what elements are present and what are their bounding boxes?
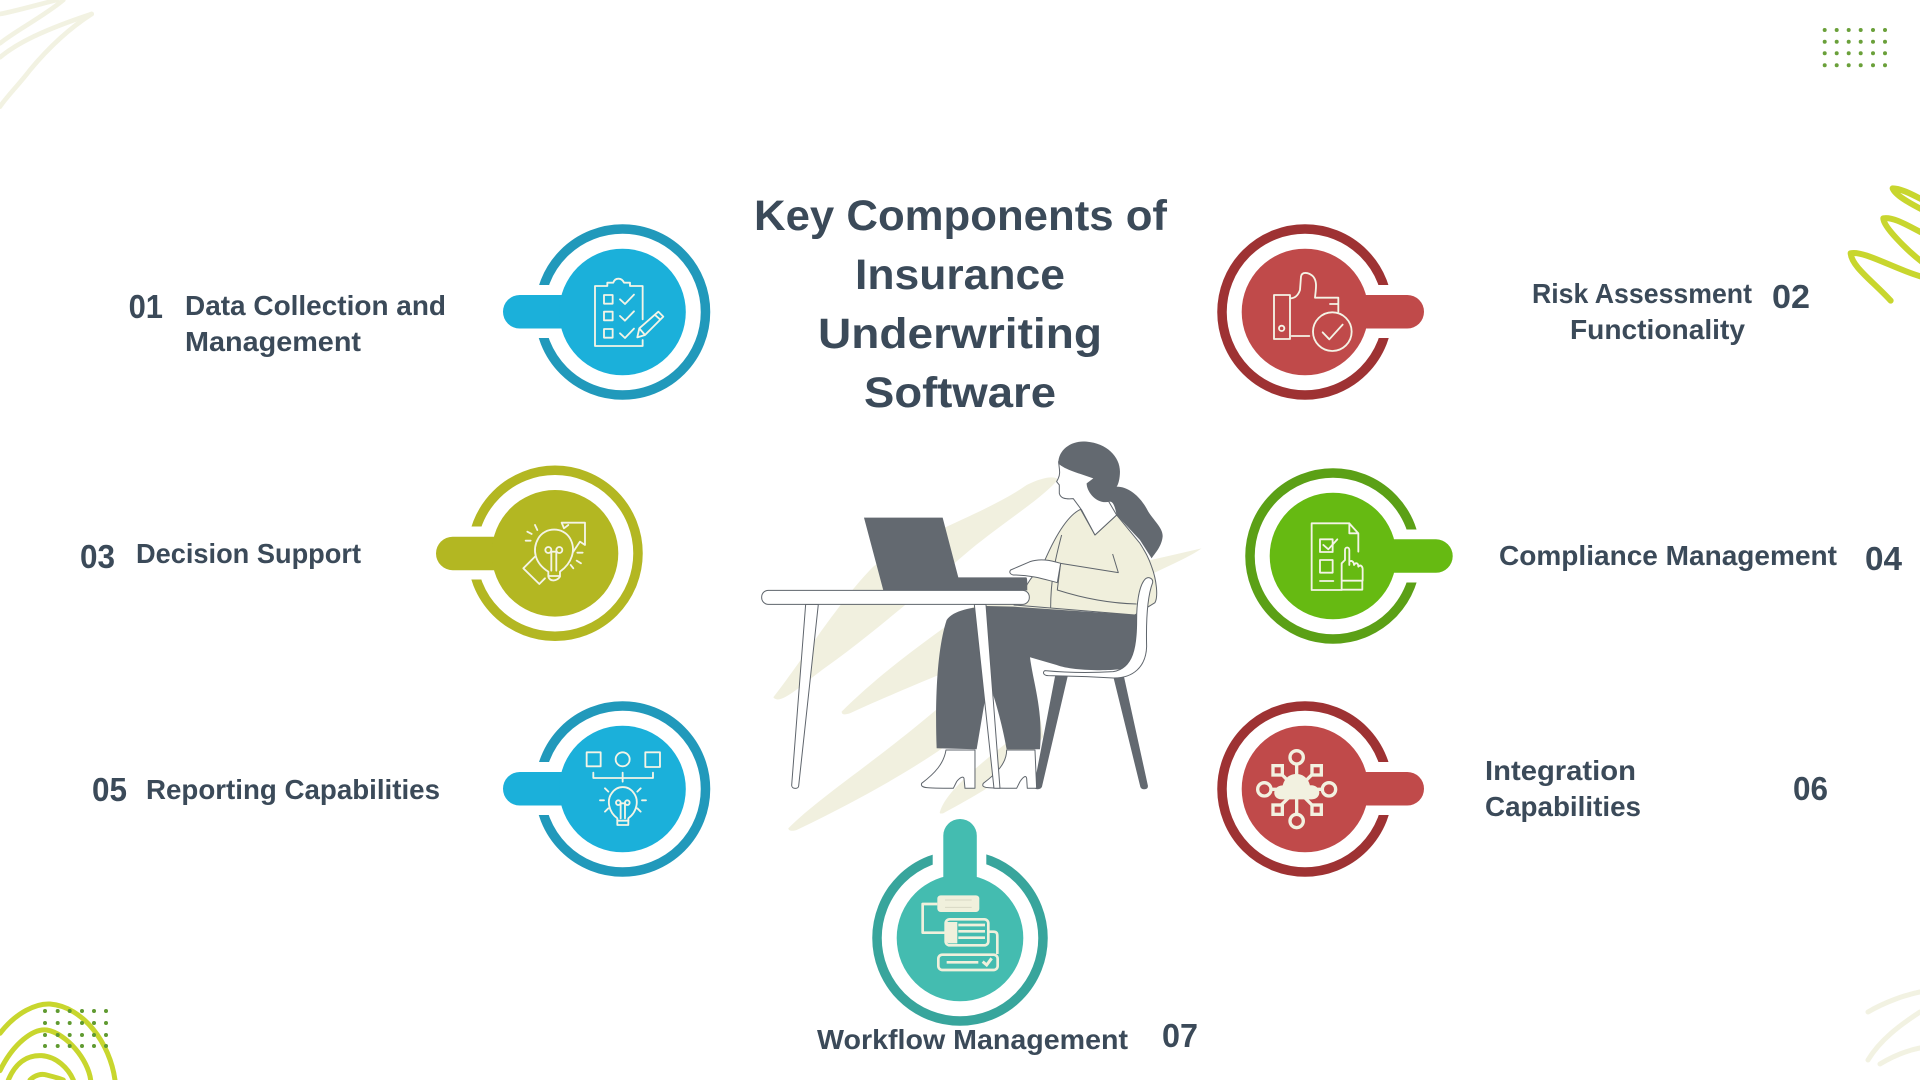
number 03: 03: [80, 538, 115, 575]
circle badge 03: [436, 470, 638, 636]
chair seat and back: [1044, 578, 1153, 678]
step 03: Decision Support: [80, 470, 638, 636]
title: Software: [864, 369, 1056, 417]
circle badge 01: [503, 229, 706, 395]
label 06: Integration: [1485, 755, 1636, 786]
brush strokes behind the figure: [773, 477, 1202, 831]
circle badge 06: [1222, 706, 1424, 872]
title: Underwriting: [818, 310, 1102, 358]
circle badge 07: [877, 819, 1043, 1021]
hair: [1058, 441, 1163, 558]
chair legs: [1035, 675, 1147, 789]
label 03: Decision Support: [136, 538, 361, 569]
number 01: 01: [129, 288, 163, 325]
circle badge 04: [1250, 473, 1453, 639]
number 05: 05: [92, 771, 127, 808]
label 01: Management: [185, 326, 361, 357]
step 06: Integration Capabilities: [1222, 706, 1828, 872]
icon: checklist with pencil: [595, 279, 663, 346]
icon: form with pointing hand: [1312, 523, 1363, 590]
circle badge 02: [1222, 229, 1424, 395]
label 06: [1485, 755, 1641, 822]
illustration: woman working at a laptop: [762, 441, 1202, 831]
step 05: Reporting Capabilities: [92, 706, 706, 872]
hand: [1010, 560, 1061, 583]
icon: workflow documents: [923, 895, 998, 970]
decoration: bottom-right scribble: [1868, 992, 1920, 1064]
trousers: [936, 606, 1137, 749]
decoration: top-left scribble: [0, 0, 92, 107]
number 06: 06: [1793, 770, 1828, 807]
decoration: top-right dot grid: [1823, 28, 1887, 67]
label 05: Reporting Capabilities: [146, 774, 440, 805]
number 02: 02: [1772, 278, 1810, 315]
label 02: [1532, 278, 1752, 345]
label 06: Capabilities: [1485, 791, 1641, 822]
laptop: [864, 518, 1027, 590]
label 01: Data Collection and: [185, 290, 446, 321]
step 02: Risk Assessment Functionality: [1222, 229, 1810, 395]
shoes: [921, 750, 1037, 788]
icon: thumbs up with check: [1274, 273, 1352, 351]
label 02: Risk Assessment: [1532, 278, 1752, 309]
table top: [762, 590, 1029, 604]
icon: flow boxes with light bulb: [587, 752, 660, 825]
step 04: Compliance Management: [1250, 473, 1903, 639]
number 07: 07: [1162, 1017, 1198, 1054]
step 07: Workflow Management: [817, 819, 1198, 1055]
decoration: bottom-left spiral and dots: [0, 1004, 115, 1080]
icon: light bulb with arrow: [523, 523, 585, 584]
label 04: Compliance Management: [1499, 540, 1837, 571]
label 01: [185, 290, 446, 357]
sweater: [1014, 509, 1157, 615]
step 01: Data Collection and Management: [129, 229, 706, 395]
icon: cloud network: [1258, 751, 1336, 828]
table legs: [792, 604, 1000, 788]
title: [754, 192, 1168, 417]
number 04: 04: [1865, 540, 1903, 577]
title: Key Components of: [754, 192, 1168, 240]
label 07: Workflow Management: [817, 1024, 1128, 1055]
label 02: Functionality: [1570, 314, 1746, 345]
circle badge 05: [503, 706, 706, 872]
face and neck: [1057, 462, 1117, 535]
title: Insurance: [855, 251, 1065, 299]
decoration: right yellow scribble: [1851, 188, 1920, 301]
